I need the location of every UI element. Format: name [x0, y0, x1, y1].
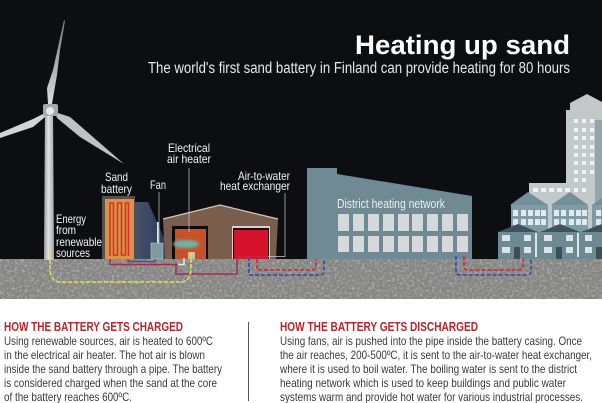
fan: [151, 222, 163, 259]
city skyline: [498, 94, 602, 259]
pipes between battery, fan and building: [110, 257, 268, 274]
label: sand battery: [101, 170, 132, 196]
air heater door: [172, 226, 208, 259]
heading: discharged: HOW THE BATTERY GETS DISCHARGED: [280, 320, 478, 334]
hot water pipe: right section: [464, 256, 523, 270]
label: air-to-water heat exchanger: heat exchanger: [220, 179, 290, 193]
tower: [529, 94, 602, 259]
front row houses: [498, 224, 602, 259]
heading: charged: HOW THE BATTERY GETS CHARGED: [4, 320, 183, 334]
building windows: [338, 214, 468, 252]
cold water pipe: left section: [249, 256, 324, 275]
label: energy from renewable sources: from: [56, 223, 76, 237]
background: night sky: [0, 0, 602, 260]
label: energy from renewable sources: [56, 212, 102, 260]
label: energy from renewable sources: Energy: [56, 212, 86, 226]
ground: [0, 259, 602, 299]
leader lines: [159, 168, 285, 256]
hot water pipe: left section: [257, 258, 316, 270]
text block: charged: in the electrical air heater. The hot air is blown: [4, 348, 205, 362]
label: sand battery: battery: [101, 182, 132, 196]
panel: how the battery gets charged: [4, 320, 222, 403]
text block: charged: is considered charged when the sand at the core: [4, 376, 217, 390]
text block: charged: Using renewable sources, air is heated to 600ºC: [4, 334, 213, 348]
text block: charged: [4, 334, 222, 403]
divider: [248, 322, 249, 401]
icon: wind turbine: [0, 20, 124, 260]
text block: charged: inside the sand battery through a pipe. The battery: [4, 362, 222, 376]
panel: how the battery gets discharged: [279, 320, 592, 403]
label: energy from renewable sources: renewable: [56, 235, 102, 249]
district heating building: [307, 168, 472, 259]
middle row houses: [510, 192, 602, 237]
energy cable: yellow dashed line: [50, 247, 191, 282]
label: fan: Fan: [150, 178, 166, 192]
electrical air heater and heat exchanger building: [163, 205, 278, 259]
label: electrical air heater: air heater: [167, 152, 211, 166]
title: Heating up sand: [355, 30, 570, 60]
cold water pipe: right section: [456, 256, 531, 275]
label: air-to-water heat exchanger: Air-to-water: [238, 169, 290, 183]
label: electrical air heater: [167, 141, 211, 166]
label: electrical air heater: Electrical: [168, 141, 210, 155]
label: energy from renewable sources: sources: [56, 246, 90, 260]
sand battery: [102, 196, 165, 259]
heat exchanger door: [232, 226, 270, 259]
label: sand battery: Sand: [105, 170, 128, 184]
building label: District heating network: [337, 197, 446, 211]
text block: discharged: [279, 334, 592, 403]
label: air-to-water heat exchanger: [220, 169, 290, 193]
